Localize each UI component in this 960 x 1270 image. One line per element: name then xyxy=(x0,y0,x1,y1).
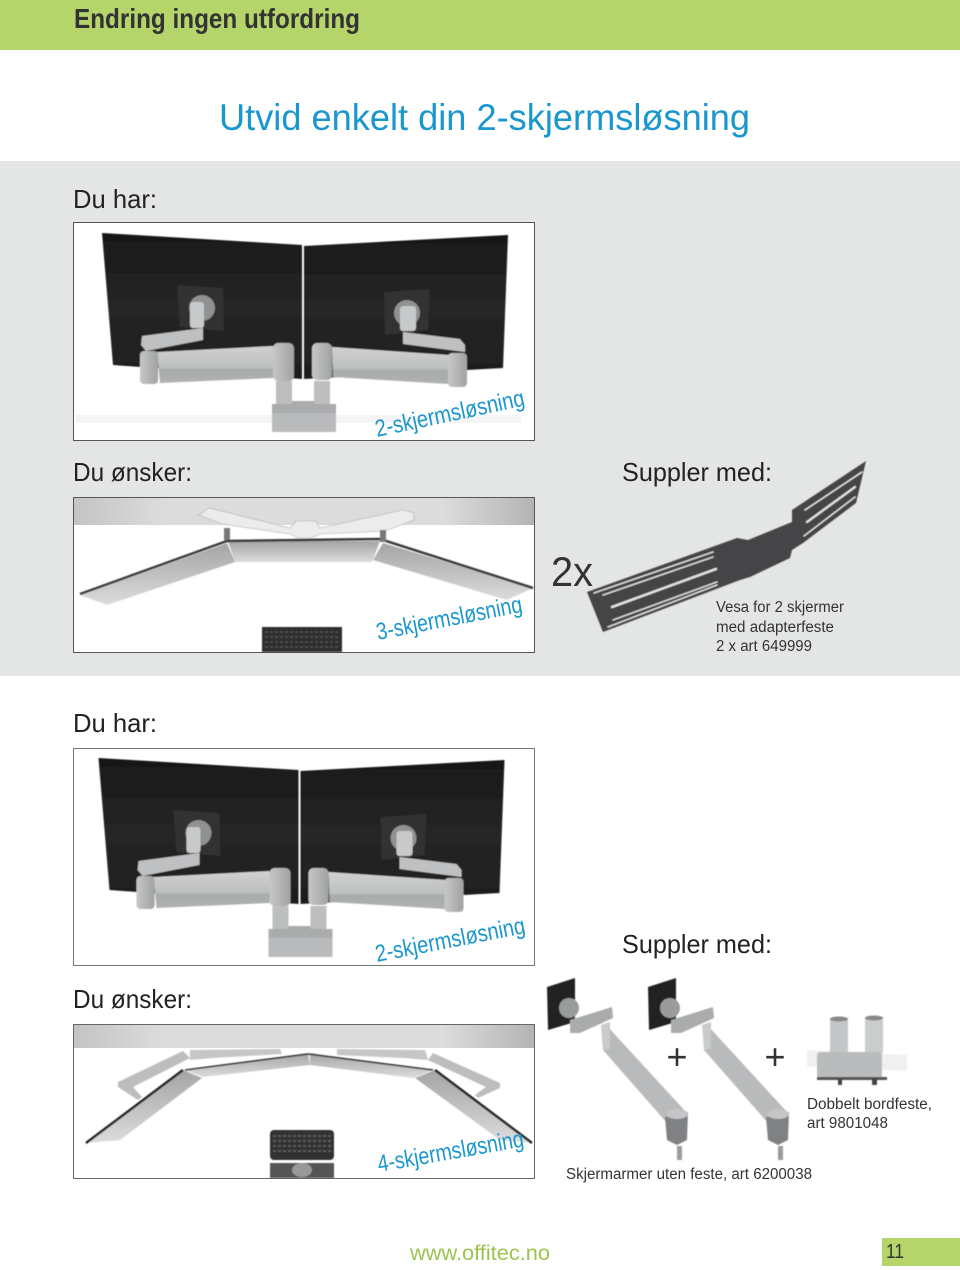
icon: VESA bracket xyxy=(587,461,866,632)
multiplier: 2x: 2x xyxy=(551,548,593,595)
label: 2-skjermsløsning second: 2-skjermsløsning xyxy=(373,912,527,968)
icon: double table clamp xyxy=(807,1016,907,1085)
panel: current 2-screen solution xyxy=(74,222,534,443)
heading: suppler med 2: Suppler med: xyxy=(622,929,772,959)
label: 4-skjermsløsning: 4-skjermsløsning xyxy=(375,1126,526,1178)
caption: double table clamp: art 9801048 xyxy=(807,1115,888,1132)
plus sign 2: + xyxy=(764,1036,786,1077)
header band xyxy=(0,0,960,50)
icon: monitor arm 1 xyxy=(547,978,688,1160)
panel: wanted 4-screen solution xyxy=(74,1024,534,1178)
caption: monitor arms: Skjermarmer uten feste, art 6200038 xyxy=(566,1166,812,1183)
grey section background xyxy=(0,161,960,676)
caption: double table clamp xyxy=(807,1096,932,1132)
heading: suppler med 1: Suppler med: xyxy=(622,457,772,487)
label: 2-skjermsløsning: 2-skjermsløsning xyxy=(373,385,527,443)
footer website: www.offitec.no xyxy=(409,1242,550,1265)
plus sign 1: + xyxy=(666,1036,688,1077)
caption: Vesa bracket xyxy=(716,599,844,655)
heading: du ønsker 2: Du ønsker: xyxy=(73,984,192,1014)
header title: Endring ingen utfordring xyxy=(74,3,360,34)
caption: Vesa bracket: med adapterfeste xyxy=(716,619,834,636)
heading: du ønsker 1: Du ønsker: xyxy=(73,457,192,487)
heading: du har 1: Du har: xyxy=(73,184,157,214)
caption: double table clamp: Dobbelt bordfeste, xyxy=(807,1096,932,1113)
icon: monitor arm 2 xyxy=(648,978,789,1160)
panel: wanted 3-screen solution xyxy=(74,498,534,652)
caption: Vesa bracket: Vesa for 2 skjermer xyxy=(716,599,844,616)
caption: Vesa bracket: 2 x art 649999 xyxy=(716,638,812,655)
heading: du har 2: Du har: xyxy=(73,708,157,738)
panel: current 2-screen solution, second case xyxy=(74,748,534,968)
label: 3-skjermsløsning: 3-skjermsløsning xyxy=(374,591,524,646)
page number tab xyxy=(882,1238,960,1266)
page number: 11 xyxy=(886,1241,904,1263)
main title: Utvid enkelt din 2-skjermsløsning xyxy=(219,97,750,138)
